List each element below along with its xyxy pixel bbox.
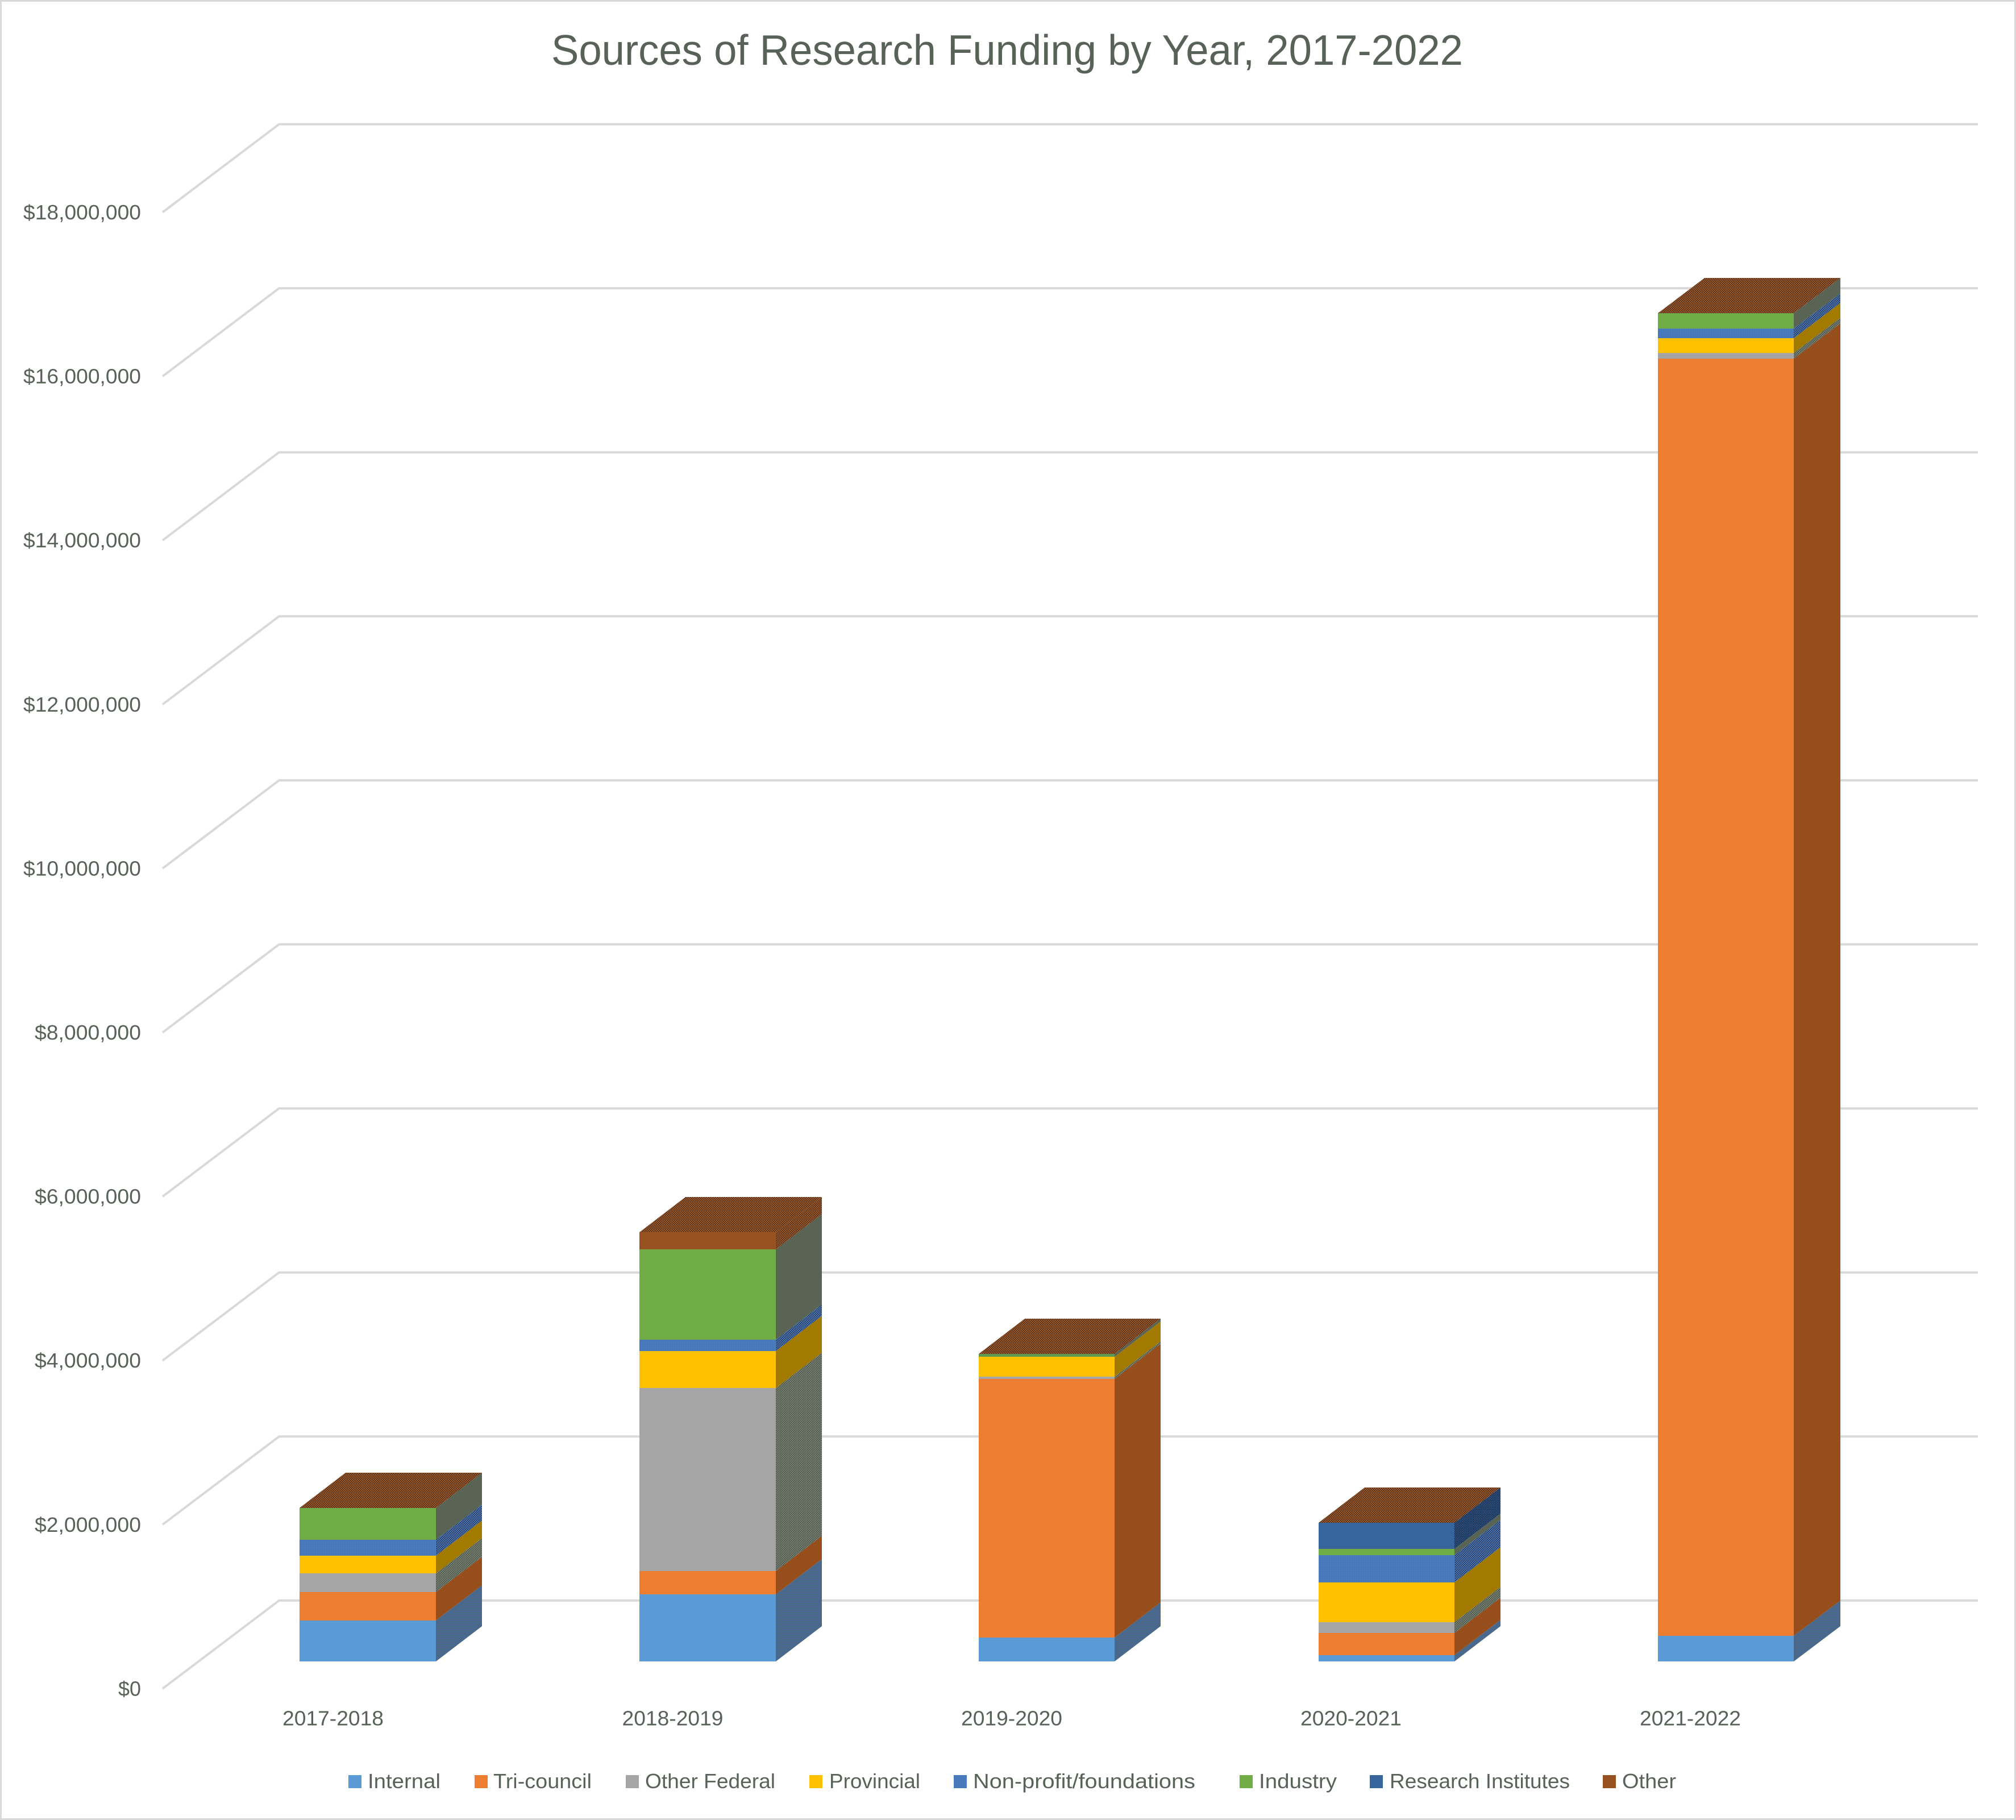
top face [639, 1197, 822, 1232]
top face [300, 1473, 482, 1508]
y axis labels: $6,000,000 [35, 1185, 141, 1208]
legend [348, 1769, 1676, 1793]
bar: 2019-2020 [979, 1319, 1161, 1661]
legend: research institutes: Research Institutes [1390, 1769, 1570, 1793]
legend: tri-council: Tri-council [493, 1769, 592, 1793]
research institutes segment [1319, 1487, 1500, 1549]
title: Sources of Research Funding by Year, 2017-2022 [551, 26, 1463, 74]
other federal segment [979, 1341, 1161, 1379]
provincial segment [1319, 1547, 1500, 1622]
y axis labels: $16,000,000 [23, 365, 141, 388]
provincial segment [979, 1322, 1161, 1377]
y axis labels: $0 [118, 1677, 141, 1700]
industry segment [300, 1473, 482, 1540]
industry segment [639, 1214, 822, 1340]
provincial segment [1658, 303, 1840, 353]
top face [979, 1319, 1161, 1354]
bar: 2021-2022 [1658, 278, 1840, 1661]
bar: 2018-2019 [639, 1197, 822, 1661]
x axis labels: 2017-2018 [282, 1706, 384, 1730]
y axis labels: $18,000,000 [23, 201, 141, 224]
provincial segment [639, 1316, 822, 1388]
y axis labels: $2,000,000 [35, 1513, 141, 1536]
other federal segment [1319, 1587, 1500, 1633]
internal segment [1658, 1601, 1840, 1661]
non-profit segment [1319, 1520, 1500, 1582]
x axis labels: 2018-2019 [622, 1706, 723, 1730]
x axis labels: 2020-2021 [1300, 1706, 1402, 1730]
internal segment [639, 1559, 822, 1661]
x axis labels: 2019-2020 [961, 1706, 1062, 1730]
tri-council segment [300, 1557, 482, 1620]
non-profit segment [1658, 293, 1840, 338]
non-profit segment [300, 1505, 482, 1556]
y axis labels: $14,000,000 [23, 529, 141, 552]
other federal segment [1658, 318, 1840, 359]
top face [1658, 278, 1840, 313]
legend: industry: Industry [1259, 1769, 1337, 1793]
other federal segment [639, 1353, 822, 1571]
top face [1319, 1487, 1500, 1523]
legend: provincial: Provincial [829, 1769, 920, 1793]
internal segment [300, 1585, 482, 1661]
internal segment [979, 1602, 1161, 1661]
provincial segment [300, 1520, 482, 1573]
other federal segment [300, 1538, 482, 1592]
legend: other [1603, 1769, 1676, 1793]
internal segment [1319, 1620, 1500, 1661]
legend: other: Other [1622, 1769, 1676, 1793]
tri-council segment [639, 1536, 822, 1594]
y axis labels: $4,000,000 [35, 1349, 141, 1372]
x axis labels [282, 1706, 1741, 1730]
y axis labels: $8,000,000 [35, 1021, 141, 1044]
non-profit segment [639, 1304, 822, 1351]
x axis labels: 2021-2022 [1640, 1706, 1741, 1730]
industry segment [1658, 278, 1840, 329]
industry segment [1319, 1514, 1500, 1555]
industry segment [979, 1319, 1161, 1357]
bar: 2020-2021 [1319, 1487, 1500, 1661]
y axis labels: $12,000,000 [23, 693, 141, 716]
other segment [639, 1197, 822, 1249]
y axis labels [23, 201, 141, 1700]
legend: internal: Internal [368, 1769, 440, 1793]
legend: non-profit/foundations: Non-profit/foundations [973, 1769, 1195, 1793]
y axis labels: $10,000,000 [23, 857, 141, 880]
gridlines [163, 124, 1978, 1689]
tri-council segment [979, 1344, 1161, 1638]
tri-council segment [1658, 323, 1840, 1636]
bar: 2017-2018 [300, 1473, 482, 1661]
tri-council segment [1319, 1598, 1500, 1655]
legend: other federal: Other Federal [645, 1769, 775, 1793]
